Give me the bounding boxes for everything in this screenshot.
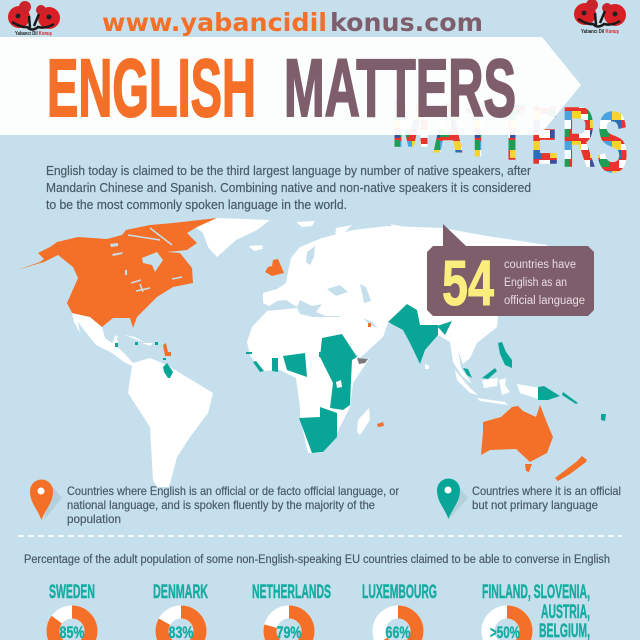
donut: Denmark 83%	[162, 612, 200, 640]
teal: Southern Africa	[299, 407, 337, 453]
website address: konus.com	[330, 8, 483, 37]
legend: teal pin	[437, 478, 468, 519]
logo left	[8, 1, 60, 37]
legend text: orange	[67, 484, 399, 526]
intro text	[46, 164, 531, 212]
Eurasia	[263, 226, 550, 384]
title banner	[0, 37, 581, 135]
intro text: English today is claimed to be the third largest language by number of native speakers, after	[46, 164, 531, 178]
title: ENGLISH	[47, 43, 256, 134]
gray: Somalia	[357, 358, 368, 364]
world map	[17, 218, 606, 487]
callout: 54 countries	[427, 224, 594, 319]
Madagascar and Sri Lanka	[357, 364, 429, 435]
Lake Victoria	[336, 380, 342, 388]
country headings	[49, 582, 590, 640]
legend text: orange: Countries where English is an official or de facto official language, or	[67, 484, 399, 498]
flag-filled MATTERS word: E	[531, 90, 558, 181]
website address	[102, 8, 483, 37]
legend text: orange: national language, and is spoken fluently by the majority of the	[67, 498, 375, 512]
flag-filled MATTERS word: M	[392, 86, 430, 160]
legend text: teal: Countries where it is an official	[472, 484, 621, 498]
teal: West Africa	[115, 342, 322, 378]
orange countries: USA, Canada, Alaska	[17, 218, 217, 328]
flag-filled MATTERS word: T	[466, 89, 490, 172]
country headings: SWEDEN	[49, 582, 95, 603]
Great Lakes and Arctic channels	[128, 228, 182, 292]
donut: Netherlands 79%	[270, 612, 308, 640]
legend text: teal	[472, 484, 621, 512]
teal: East Africa	[320, 334, 357, 410]
teal: Asia-Pacific islands	[463, 342, 606, 421]
flag-filled MATTERS word: R	[562, 90, 595, 184]
callout text: English as an	[504, 277, 567, 289]
flag-filled MATTERS word	[392, 86, 628, 189]
orange: Caribbean, Oman dot, Mauritius	[163, 323, 384, 427]
Latin America	[72, 313, 213, 487]
intro text: Mandarin Chinese and Spanish. Combining native and non-native speakers it is considered	[46, 181, 531, 195]
logo left: Yabancı Dil Konuş	[15, 31, 52, 37]
Greenland and Iceland	[193, 218, 405, 257]
Indonesian islands	[455, 370, 540, 405]
logo right: Yabancı Dil Konuş	[581, 29, 619, 35]
flag-filled MATTERS word: A	[433, 89, 463, 167]
donut: Sweden 85%	[53, 612, 91, 640]
legend text: orange: population	[67, 512, 121, 526]
orange: New Zealand	[555, 456, 587, 481]
country headings: AUSTRIA,	[541, 602, 590, 623]
callout text: countries have	[504, 259, 576, 271]
intro text: to be the most commonly spoken language in the world.	[46, 198, 347, 212]
logo right	[574, 0, 626, 35]
website address: www.yabancidil	[102, 8, 327, 37]
donut: Luxembourg 66%	[379, 612, 417, 640]
big number 54: 54	[442, 247, 494, 319]
orange: United Kingdom and Ireland	[265, 259, 284, 276]
legend: orange pin	[30, 480, 62, 520]
teal: India and Bangladesh	[388, 304, 452, 364]
country headings: DENMARK	[153, 582, 208, 603]
callout text: official language	[504, 295, 585, 307]
flag-filled MATTERS word: T	[499, 88, 525, 176]
legend text: teal: but not primary language	[472, 498, 598, 512]
Africa	[247, 308, 369, 453]
orange: Australia	[481, 405, 553, 472]
inland seas	[306, 246, 378, 328]
callout text	[504, 259, 585, 307]
country headings: NETHERLANDS	[252, 582, 331, 603]
section subtitle: Percentage of the adult population of some non-English-speaking EU countries claimed to be able to converse in English	[24, 554, 610, 566]
country headings: LUXEMBOURG	[362, 582, 437, 603]
donut: over 50%	[488, 612, 526, 640]
